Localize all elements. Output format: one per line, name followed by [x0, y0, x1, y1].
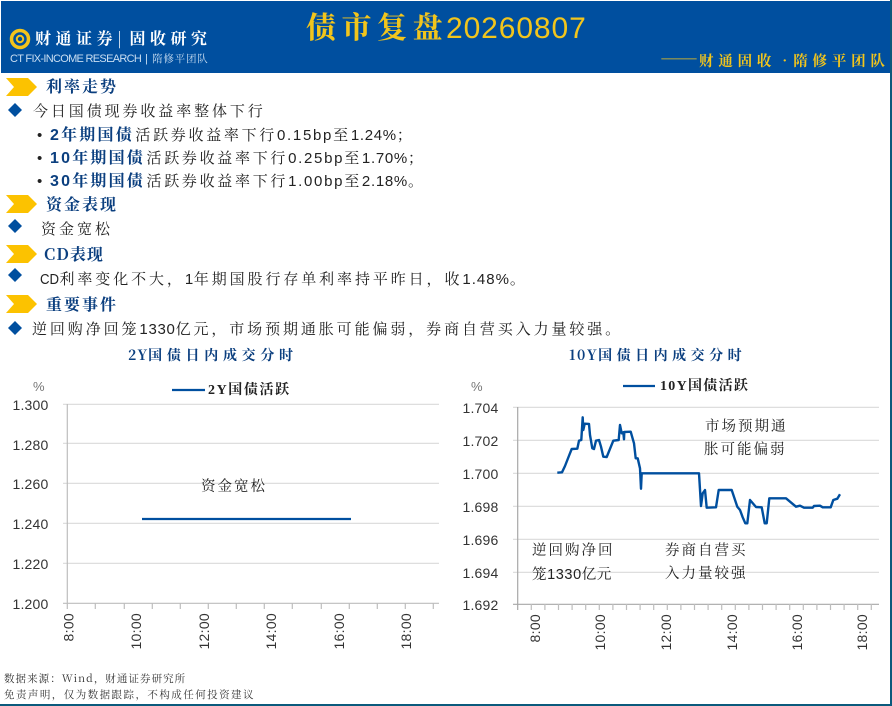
text: 30Y yield: 30年期国债活跃券收益率下行1.00bp至2.18%。	[50, 173, 426, 190]
x axis labels: 8:00	[60, 613, 76, 641]
icon: chevron	[6, 78, 37, 96]
y axis labels: 1.696	[462, 532, 499, 548]
logo text: |	[117, 26, 122, 49]
text: 2Y yield: •	[37, 127, 42, 144]
section: funding	[6, 192, 118, 238]
data line	[142, 518, 351, 520]
section: CD	[6, 242, 528, 288]
annotation: brokers: 入力量较强	[665, 565, 748, 582]
chart: 10Y intraday line	[462, 377, 879, 651]
logo subtitle: CT FIX-INCOME RESEARCH 隋修平团队	[10, 51, 209, 66]
team attribution: •	[777, 50, 792, 71]
text: CD rates: CD	[40, 271, 59, 288]
annotation: reverse repo	[532, 542, 614, 583]
text: 10Y yield: •	[37, 150, 42, 167]
y axis labels: 1.260	[12, 476, 49, 492]
y axis labels: 1.698	[462, 499, 499, 515]
y axis labels: 1.694	[462, 565, 499, 581]
x axis labels: 16:00	[331, 613, 347, 650]
x axis labels: 14:00	[724, 614, 740, 651]
text: overall yields: 今日国债现券收益率整体下行	[33, 103, 266, 120]
legend	[623, 377, 749, 394]
heading: funding: 资金表现	[46, 192, 118, 215]
y axis labels: 1.704	[462, 400, 499, 416]
icon: chevron	[6, 195, 37, 213]
annotation: reverse repo: 逆回购净回	[532, 542, 614, 559]
annotation: reverse repo: 笼1330亿元	[532, 566, 612, 583]
heading: key events: 重要事件	[46, 292, 118, 315]
icon: chevron	[6, 295, 37, 313]
text: 10Y yield: 10年期国债活跃券收益率下行0.25bp至1.70%；	[50, 150, 426, 167]
team attribution: ——财通固收 隋修平团队	[660, 45, 890, 72]
heading: rates trend: 利率走势	[46, 74, 118, 97]
section: key events	[6, 292, 623, 338]
x axis labels: 14:00	[263, 613, 279, 650]
annotation: inflation: 市场预期通	[705, 418, 788, 435]
x axis labels: 18:00	[398, 613, 414, 650]
icon: diamond	[8, 321, 22, 335]
icon: company logo	[10, 28, 30, 50]
x axis labels: 12:00	[658, 614, 674, 651]
icon: diamond	[8, 268, 22, 282]
x axis labels	[527, 614, 870, 651]
y axis labels: 1.700	[462, 466, 499, 482]
icon: chevron	[6, 245, 37, 263]
data line	[557, 417, 840, 523]
y axis labels: 1.220	[12, 556, 49, 572]
annotation: inflation	[704, 418, 788, 458]
footer disclaimer: 免责声明，仅为数据跟踪，不构成任何投资建议	[4, 687, 255, 702]
x axis labels: 8:00	[527, 614, 543, 642]
legend	[172, 381, 291, 398]
chart: 2Y intraday line	[12, 379, 439, 650]
y axis labels: 1.300	[12, 397, 49, 413]
x axis labels	[60, 613, 414, 650]
y axis labels: 1.702	[462, 433, 499, 449]
annotation: 资金宽松	[201, 475, 267, 496]
y axis labels: 1.692	[462, 597, 499, 613]
x axis labels: 12:00	[196, 613, 212, 650]
logo text: 财通证券 固收研究	[35, 26, 212, 49]
annotation: inflation: 胀可能偏弱	[704, 441, 786, 458]
title: 债市复盘20260807	[306, 3, 587, 47]
heading: CD: CD表现	[44, 242, 104, 265]
x axis labels: 10:00	[592, 614, 608, 651]
heading: 10Y chart title: 10Y国债日内成交分时	[569, 345, 746, 365]
y axis labels: 1.200	[12, 596, 49, 612]
annotation: brokers	[665, 541, 748, 582]
legend: 10Y国债活跃	[660, 377, 749, 394]
section: rates trend	[6, 74, 426, 190]
y axis labels: 1.280	[12, 437, 49, 453]
unit label: %	[471, 379, 483, 394]
x axis labels: 18:00	[854, 614, 870, 651]
icon: diamond	[8, 219, 22, 233]
annotation: brokers: 券商自营买	[665, 541, 748, 559]
text: 30Y yield: •	[37, 173, 42, 190]
y axis labels: 1.240	[12, 516, 49, 532]
footer source note: 数据来源：Wind，财通证券研究所	[4, 671, 186, 686]
text: 2Y yield: 2年期国债活跃券收益率下行0.15bp至1.24%；	[50, 127, 415, 144]
x axis labels: 10:00	[128, 613, 144, 650]
text: CD rates: 利率变化不大，1年期国股行存单利率持平昨日，收1.48%。	[60, 271, 528, 288]
y axis labels	[12, 397, 49, 612]
legend: 2Y国债活跃	[208, 381, 291, 398]
logo subtitle: |	[145, 53, 148, 65]
text: funding loose: 资金宽松	[41, 221, 113, 238]
x axis labels: 16:00	[789, 614, 805, 651]
heading: 2Y chart title: 2Y国债日内成交分时	[128, 345, 298, 365]
header banner	[1, 1, 890, 73]
unit label: %	[33, 379, 45, 394]
text: events: 逆回购净回笼1330亿元，市场预期通胀可能偏弱，券商自营买入力量较强。	[32, 321, 623, 338]
y axis labels	[462, 400, 499, 613]
icon: diamond	[8, 103, 22, 117]
